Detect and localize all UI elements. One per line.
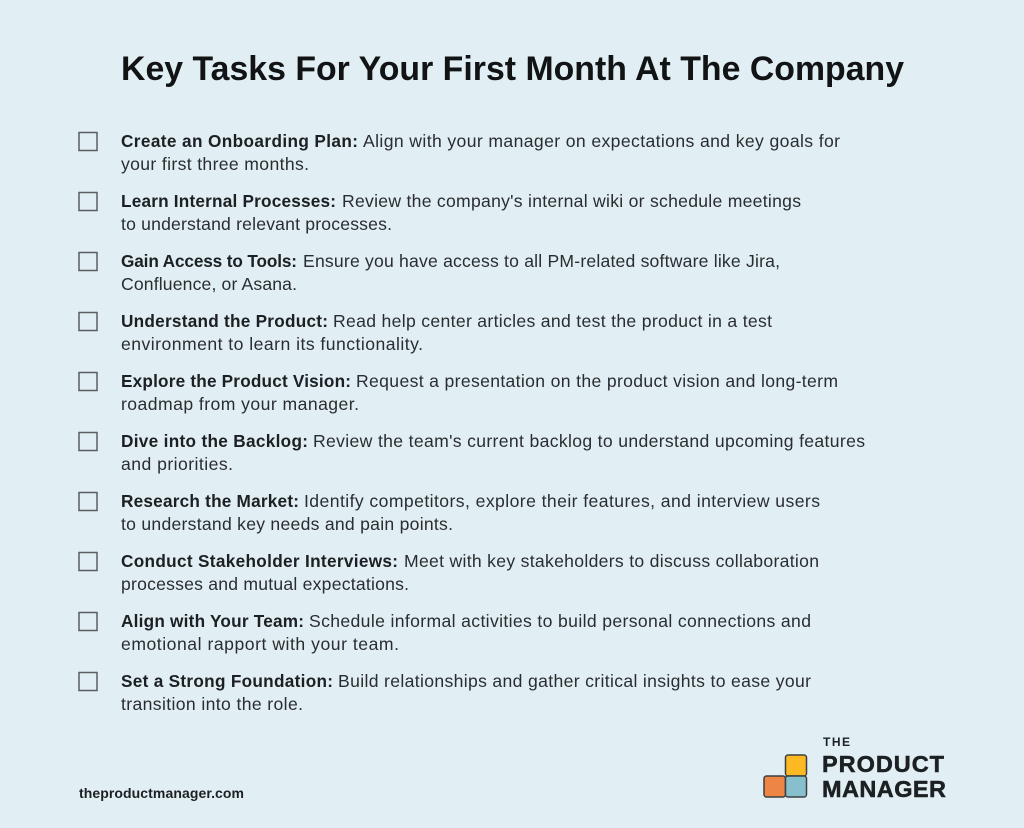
item: set a strong foundation: Set a Strong Foundation: [121, 671, 333, 691]
item: learn internal processes: to understand relevant processes. [121, 214, 392, 234]
logo wordmark: THE [823, 735, 850, 749]
item: create an onboarding plan: Align with your manager on expectations and key goals for [363, 131, 840, 151]
checklist [79, 131, 865, 714]
item: dive into the backlog: Dive into the Backlog: [121, 431, 308, 451]
item: gain access to tools: Ensure you have access to all PM-related software like Jira, [303, 251, 780, 271]
item: explore the product vision: Explore the Product Vision: [121, 371, 351, 391]
item: conduct stakeholder interviews: Meet with key stakeholders to discuss collaboration [404, 551, 819, 571]
item: set a strong foundation: Build relationships and gather critical insights to ease your [338, 671, 811, 691]
item: gain access to tools: Confluence, or Asana. [121, 274, 297, 294]
item: learn internal processes: Review the company's internal wiki or schedule meetings [342, 191, 801, 211]
item: dive into the backlog: Review the team's current backlog to understand upcoming features [313, 431, 865, 451]
item: dive into the backlog: and priorities. [121, 454, 233, 474]
item: create an onboarding plan: Create an Onboarding Plan: [121, 131, 358, 151]
item: conduct stakeholder interviews: processes and mutual expectations. [121, 574, 409, 594]
logo wordmark [822, 735, 946, 802]
item: align with your team: emotional rapport with your team. [121, 634, 399, 654]
item: align with your team: Schedule informal activities to build personal connections and [309, 611, 811, 631]
item: understand the product: environment to learn its functionality. [121, 334, 423, 354]
item: align with your team: Align with Your Team: [121, 611, 304, 631]
item: explore the product vision: roadmap from your manager. [121, 394, 359, 414]
item: dive into the backlog [79, 431, 865, 474]
item: create an onboarding plan: your first three months. [121, 154, 309, 174]
item: understand the product: Read help center articles and test the product in a test [333, 311, 772, 331]
item: learn internal processes: Learn Internal Processes: [121, 191, 336, 211]
item: research the market: to understand key needs and pain points. [121, 514, 453, 534]
item: gain access to tools [79, 251, 780, 294]
item: understand the product: Understand the Product: [121, 311, 328, 331]
item: set a strong foundation [79, 671, 811, 714]
item: learn internal processes [79, 191, 801, 234]
logo wordmark: MANAGER [822, 776, 946, 802]
logo [764, 735, 946, 802]
item: conduct stakeholder interviews [79, 551, 819, 594]
item: conduct stakeholder interviews: Conduct Stakeholder Interviews: [121, 551, 398, 571]
item: create an onboarding plan [79, 131, 840, 174]
website url: theproductmanager.com [79, 785, 244, 801]
item: research the market: Research the Market: [121, 491, 299, 511]
logo wordmark: PRODUCT [822, 751, 945, 777]
title: Key Tasks For Your First Month At The Company [121, 50, 904, 88]
item: research the market [79, 491, 820, 534]
item: align with your team [79, 611, 811, 654]
item: set a strong foundation: transition into the role. [121, 694, 303, 714]
item: explore the product vision: Request a presentation on the product vision and long-term [356, 371, 838, 391]
icon: logo blocks [764, 755, 806, 797]
item: understand the product [79, 311, 772, 354]
item: gain access to tools: Gain Access to Tools: [121, 251, 297, 271]
item: explore the product vision [79, 371, 838, 414]
item: research the market: Identify competitors, explore their features, and interview users [304, 491, 820, 511]
